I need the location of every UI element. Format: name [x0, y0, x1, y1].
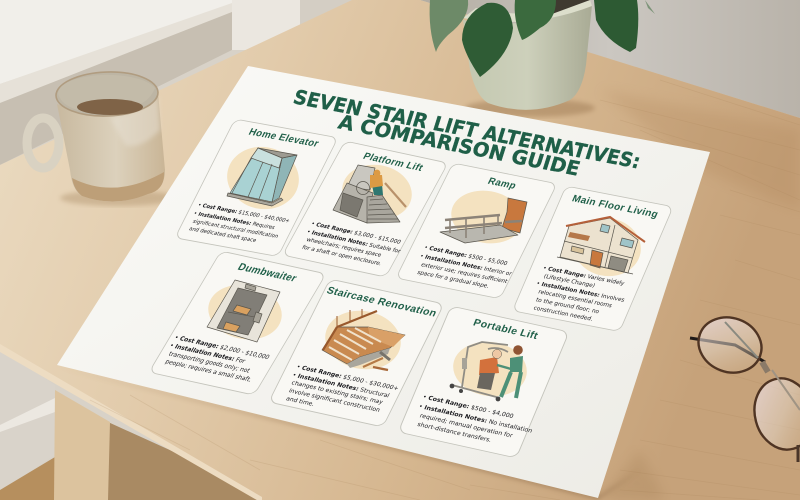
- card frame: [398, 306, 569, 458]
- text: platform lift details: wheelchairs; requires space: [305, 237, 383, 259]
- card frame: [269, 279, 444, 427]
- heading: home elevator: Home Elevator: [247, 127, 321, 150]
- text: ramp details: exterior use; requires sufficient: [420, 262, 509, 285]
- text: dumbwaiter details: transporting goods only; not: [167, 351, 252, 375]
- glasses: [690, 309, 800, 462]
- icon: ramp: [440, 185, 527, 249]
- text: platform lift details: • Installation Notes: Suitable for: [305, 229, 402, 255]
- heading: portable lift: Portable Lift: [471, 318, 540, 342]
- text: home elevator details: • Cost Range: $15,000 - $40,000+: [196, 202, 291, 225]
- text: main floor living details: to the ground floor; no: [535, 298, 600, 315]
- panel: main floor living: [512, 186, 673, 332]
- text: staircase renovation details: and time.: [285, 395, 316, 408]
- paper sheet: [57, 66, 710, 500]
- text: main floor living details: relocating essential rooms: [537, 289, 613, 309]
- text: dumbwaiter details: [159, 334, 271, 384]
- heading: dumbwaiter: Dumbwaiter: [235, 262, 299, 285]
- text: home elevator details: • Installation Notes: Requires: [192, 211, 276, 231]
- card frame: [283, 141, 448, 277]
- panel: portable lift: [398, 306, 569, 458]
- text: home elevator details: [185, 202, 291, 248]
- text: home elevator details: and dedicated shaft space: [188, 226, 258, 244]
- text: ramp details: • Installation Notes: Interior or: [418, 254, 513, 278]
- text: platform lift details: • Cost Range: $3,000 - $15,000: [310, 221, 402, 246]
- heading: ramp: Ramp: [486, 176, 518, 192]
- text: dumbwaiter details: • Installation Notes: For: [168, 342, 247, 365]
- card frame: [175, 119, 338, 257]
- text: main floor living details: • Installation Notes: Involves: [535, 281, 625, 304]
- text: staircase renovation details: • Cost Range: $5,000 - $30,000+: [295, 364, 400, 392]
- text: portable lift details: short-distance transfers.: [416, 421, 492, 444]
- icon: platform lift: [333, 159, 416, 225]
- text: staircase renovation details: [280, 364, 400, 423]
- text: staircase renovation details: involve significant construction: [287, 388, 381, 414]
- text: portable lift details: • Installation Notes: No installation: [418, 403, 533, 435]
- text: platform lift details: for a shaft or open enclosure.: [301, 245, 383, 267]
- text: ramp details: space for a gradual slope.: [416, 270, 490, 290]
- heading: platform lift: Platform Lift: [361, 151, 425, 174]
- text: main floor living details: construction needed.: [532, 306, 594, 323]
- icon: home elevator: [222, 141, 304, 215]
- heading: staircase renovation: Staircase Renovation: [325, 286, 438, 319]
- background: floor and table leg: [0, 348, 280, 500]
- text: home elevator details: significant structural modification: [191, 219, 279, 240]
- text: ramp details: [411, 245, 518, 293]
- icon: portable lift: [450, 337, 530, 401]
- text: dumbwaiter details: • Cost Range: $2,000 - $10,000: [173, 334, 271, 361]
- panel: home elevator: [175, 119, 338, 257]
- icon: dumbwaiter: [204, 279, 286, 345]
- text: portable lift details: required; manual operation for: [419, 413, 514, 439]
- text: portable lift details: [410, 394, 537, 451]
- card frame: [512, 186, 673, 332]
- text: staircase renovation details: • Installation Notes: Structural: [291, 372, 391, 399]
- icon: staircase renovation: [321, 305, 405, 375]
- coffee mug: [27, 70, 176, 206]
- panel: staircase renovation: [269, 279, 444, 427]
- text: main floor living details: • Cost Range: Varies widely: [542, 266, 626, 287]
- icon: main floor living: [557, 213, 646, 281]
- title: SEVEN STAIR LIFT ALTERNATIVES:: [290, 85, 644, 173]
- title: A COMPARISON GUIDE: [335, 110, 583, 181]
- text: staircase renovation details: changes to existing stairs; may: [290, 380, 385, 406]
- text: portable lift details: • Cost Range: $500 - $4,000: [421, 394, 515, 420]
- card frame: [149, 251, 326, 395]
- heading: main floor living: Main Floor Living: [570, 194, 660, 220]
- plant: pot and leaves: [430, 0, 655, 117]
- text: ramp details: • Cost Range: $500 - $5,000: [423, 245, 509, 267]
- card frame: [396, 163, 557, 299]
- panel: dumbwaiter: [149, 251, 326, 395]
- panel: ramp: [396, 163, 557, 299]
- text: main floor living details: [525, 266, 632, 327]
- panel: platform lift: [283, 141, 448, 277]
- text: platform lift details: [297, 221, 406, 270]
- text: main floor living details: (Lifestyle Change): [543, 274, 596, 289]
- text: dumbwaiter details: people; requires a small shaft.: [164, 359, 253, 384]
